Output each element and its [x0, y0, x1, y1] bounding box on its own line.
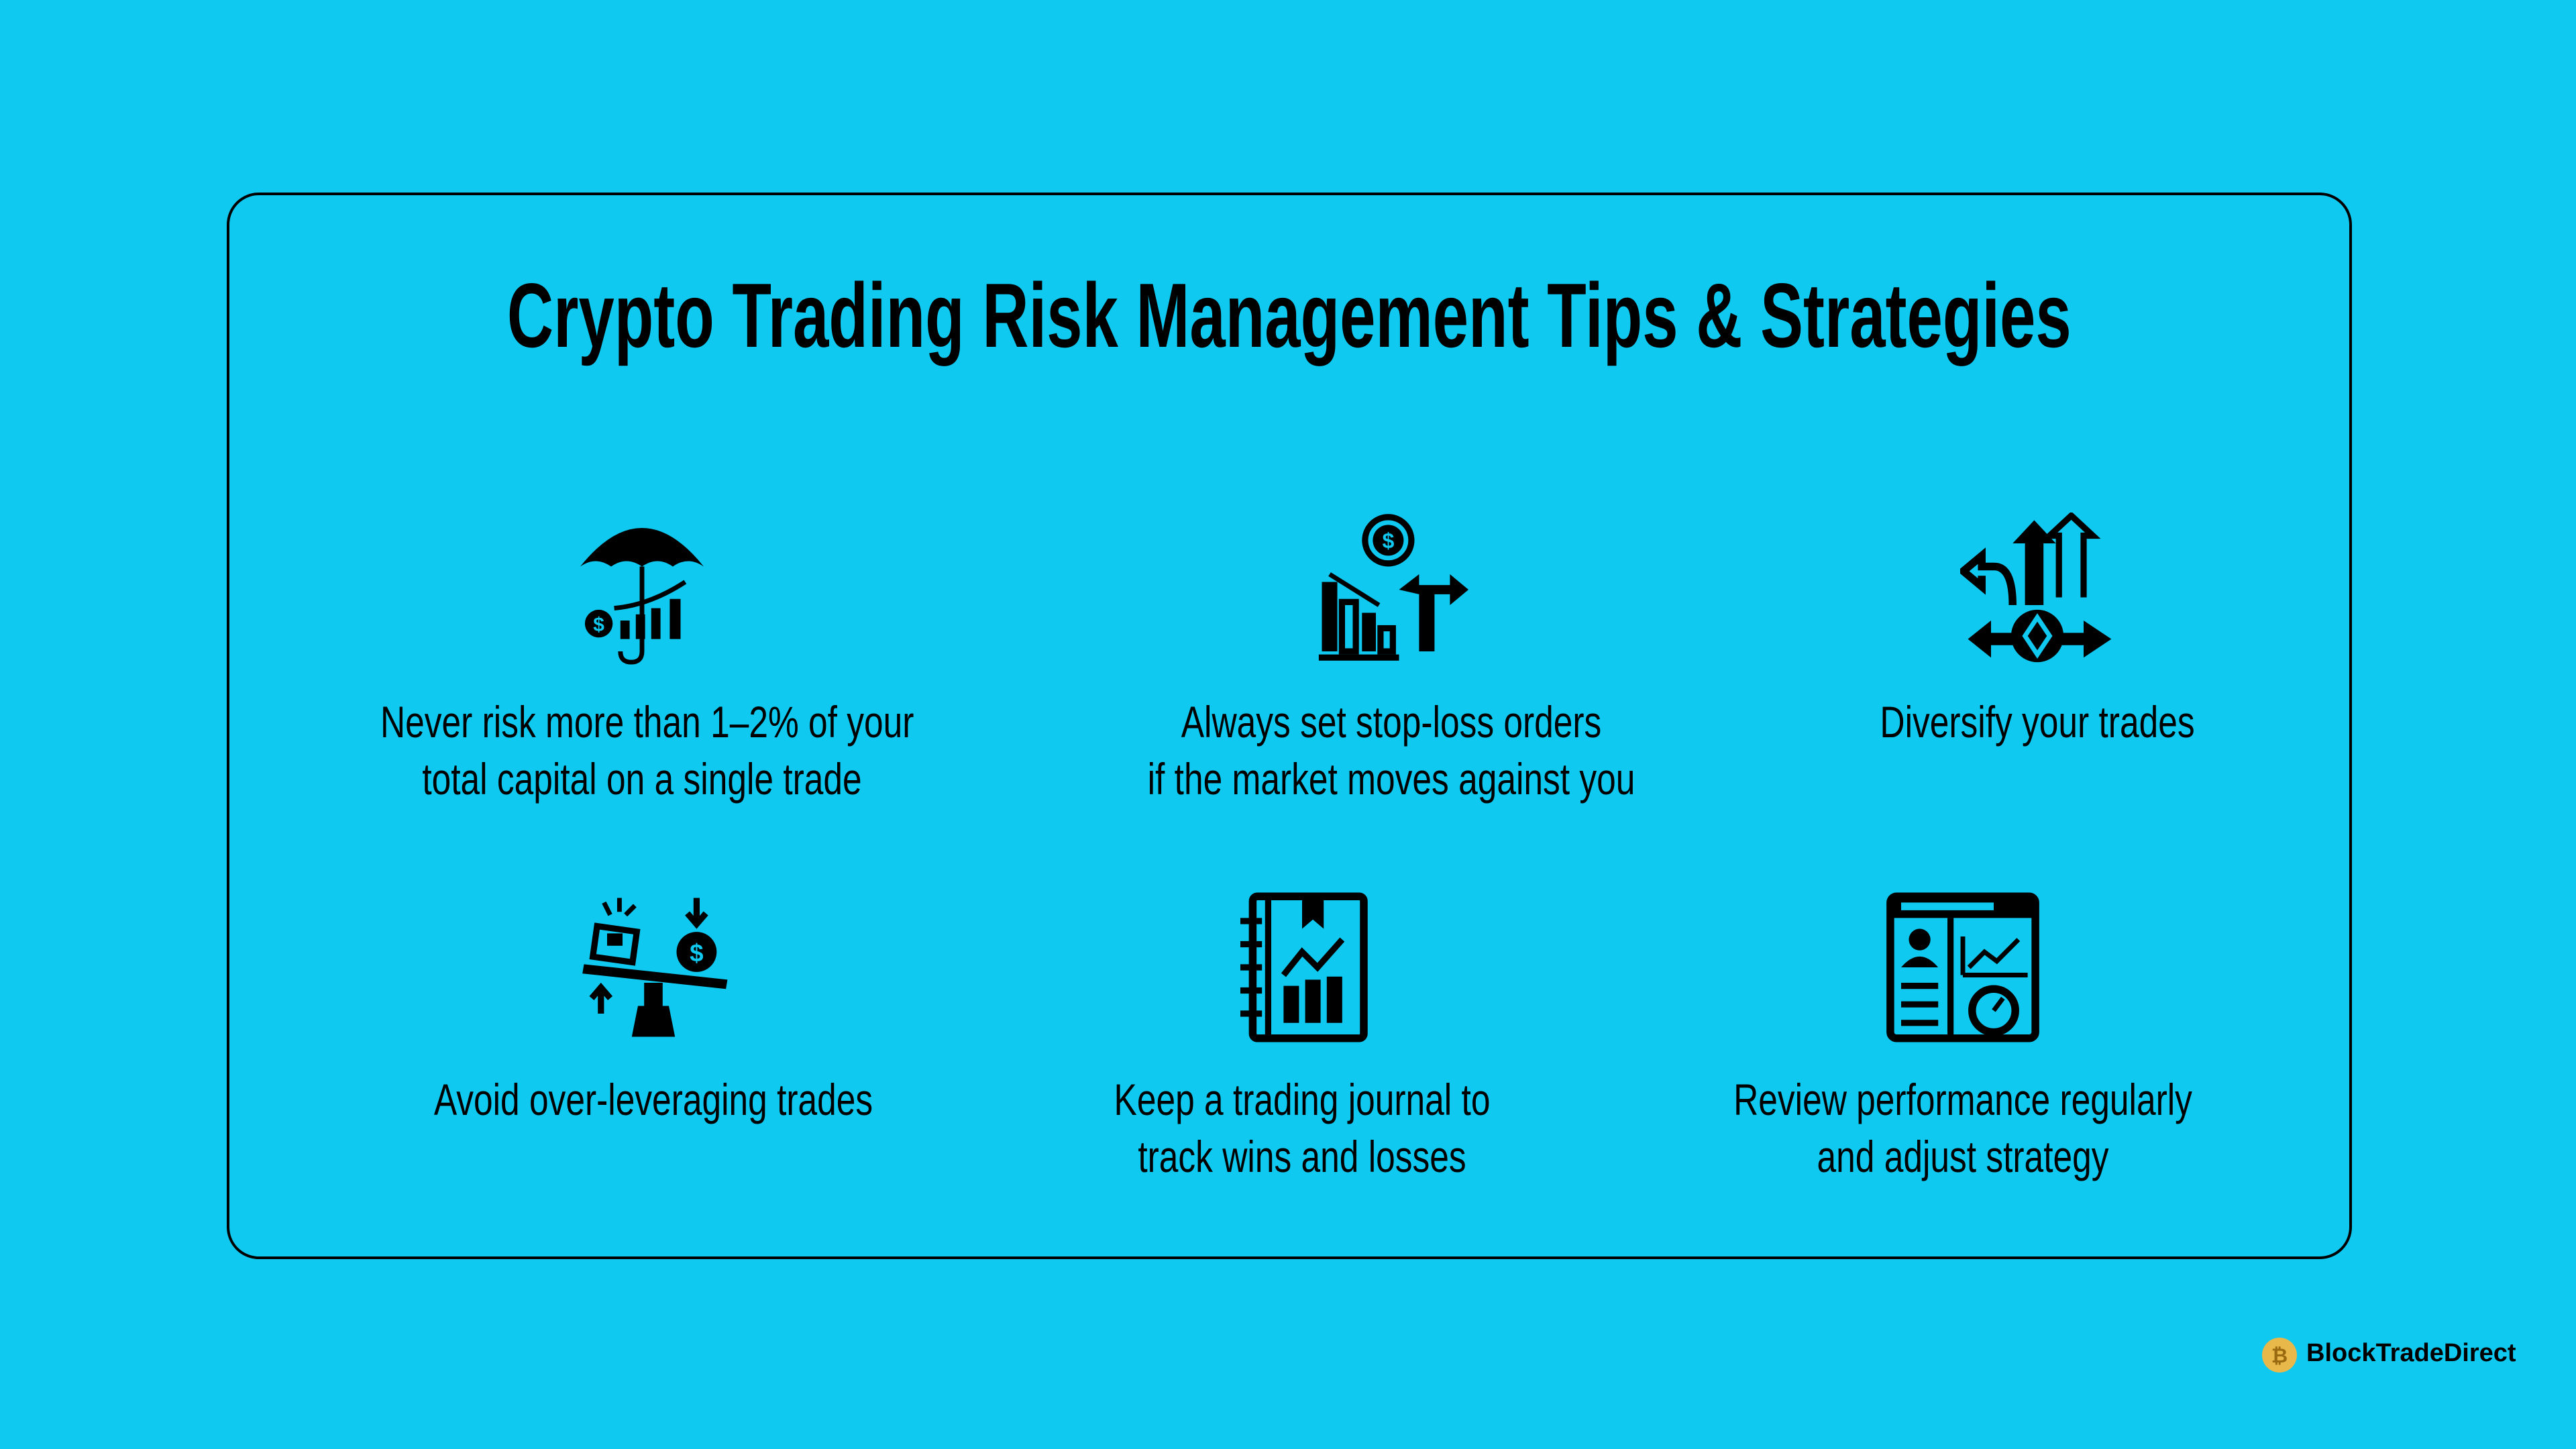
tip 6 — [1733, 892, 2192, 1181]
icon: leverage seesaw — [582, 898, 727, 1037]
tip 2: if the market moves against you — [1148, 754, 1635, 804]
title: Crypto Trading Risk Management Tips & Strategies — [507, 264, 2072, 366]
tip 3: Diversify your trades — [1880, 697, 2195, 747]
tip 5: track wins and losses — [1138, 1132, 1466, 1181]
icon: umbrella over chart: $ — [593, 614, 604, 636]
tip 6: and adjust strategy — [1817, 1132, 2108, 1181]
logo: BlockTradeDirect — [2262, 1338, 2516, 1373]
tip 2: Always set stop-loss orders — [1181, 697, 1601, 747]
icon: stop-loss chart — [1319, 514, 1468, 661]
tip 5: Keep a trading journal to — [1114, 1075, 1490, 1124]
panel: main frame — [227, 193, 2352, 1259]
tip 3 — [1880, 513, 2195, 747]
tip 4: Avoid over-leveraging trades — [434, 1075, 873, 1124]
tip 6: Review performance regularly — [1733, 1075, 2192, 1124]
tip 1: total capital on a single trade — [422, 754, 862, 804]
icon: stop-loss chart: $ — [1382, 529, 1394, 553]
icon: trading journal — [1240, 892, 1368, 1042]
icon: performance dashboard — [1886, 892, 2039, 1042]
logo: BlockTradeDirect: BlockTradeDirect — [2306, 1339, 2516, 1367]
icon: umbrella over chart — [580, 528, 704, 664]
tip 1 — [380, 528, 914, 804]
tip 1: Never risk more than 1–2% of your — [380, 697, 914, 747]
tip 2 — [1148, 514, 1635, 804]
icon: leverage seesaw: $ — [690, 939, 704, 967]
tip 4 — [434, 898, 873, 1124]
logo: BlockTradeDirect: ₿ — [2271, 1345, 2288, 1367]
tip 5 — [1114, 892, 1490, 1181]
icon: diversify arrows — [1960, 513, 2112, 663]
